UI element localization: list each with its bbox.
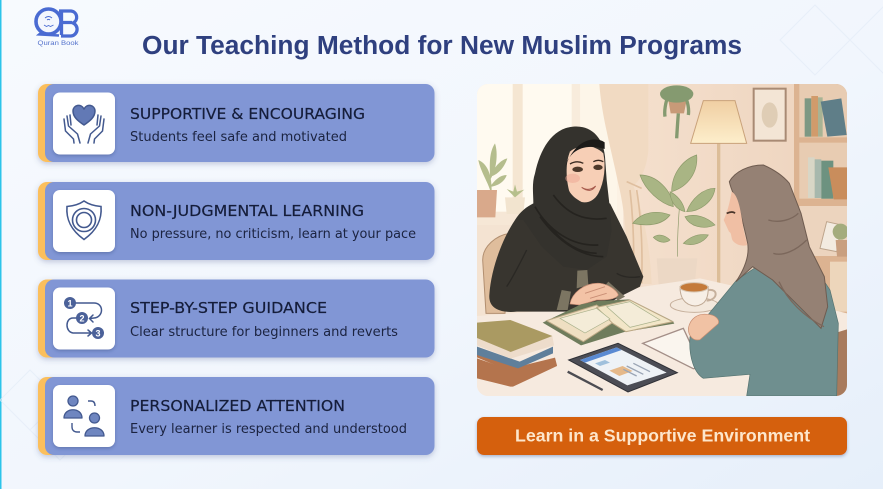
teacher hands	[570, 283, 618, 305]
stacked books	[477, 355, 557, 373]
title: Our Teaching Method for New Muslim Programs	[142, 32, 742, 60]
icon: two people	[64, 396, 104, 436]
teacher hijab	[515, 126, 610, 220]
description: Students feel safe and motivated	[130, 129, 347, 145]
open book	[543, 299, 674, 345]
floor plant	[657, 258, 697, 285]
student body	[690, 260, 838, 396]
cup	[670, 298, 718, 312]
sheer curtain	[614, 178, 624, 230]
card: personalized attention	[38, 377, 434, 455]
teacher chair	[483, 233, 510, 313]
lamp	[717, 143, 720, 283]
label: PERSONALIZED ATTENTION	[130, 397, 345, 415]
icon: numbered steps: 2	[79, 314, 85, 324]
student face	[724, 192, 747, 246]
icon: numbered steps	[64, 297, 104, 339]
icon: numbered steps: 3	[95, 328, 101, 338]
shelf	[794, 84, 847, 317]
hanging plant	[668, 101, 686, 114]
call to action button	[477, 417, 847, 455]
framed art	[754, 89, 786, 141]
card: supportive and encouraging	[38, 84, 434, 162]
description: No pressure, no criticism, learn at your pace	[130, 226, 416, 242]
curtain	[599, 84, 652, 284]
pen	[568, 372, 603, 390]
label: SUPPORTIVE & ENCOURAGING	[130, 105, 365, 123]
icon: hands holding heart	[64, 105, 104, 143]
call to action button: Learn in a Supportive Environment	[515, 426, 810, 446]
student hands	[688, 314, 719, 340]
teacher face	[567, 146, 605, 202]
student chair	[836, 329, 847, 396]
description: Clear structure for beginners and reverts	[130, 324, 398, 340]
logo: Quran Book: Quran Book	[38, 40, 79, 47]
description: Every learner is respected and understood	[130, 421, 407, 437]
logo: Quran Book	[36, 9, 79, 47]
icon: shield	[67, 201, 101, 240]
label: STEP-BY-STEP GUIDANCE	[130, 299, 327, 317]
illustration: teacher and student at table	[477, 84, 849, 396]
card: non-judgmental learning	[38, 182, 434, 260]
label: NON-JUDGMENTAL LEARNING	[130, 202, 364, 220]
window	[477, 84, 572, 212]
tablet	[569, 343, 677, 392]
window plant	[478, 143, 507, 190]
card: step-by-step guidance	[38, 280, 434, 358]
teacher body	[489, 203, 643, 312]
table	[477, 278, 847, 396]
icon: numbered steps: 1	[67, 298, 73, 308]
notebook	[643, 328, 702, 369]
student hijab	[729, 165, 828, 328]
